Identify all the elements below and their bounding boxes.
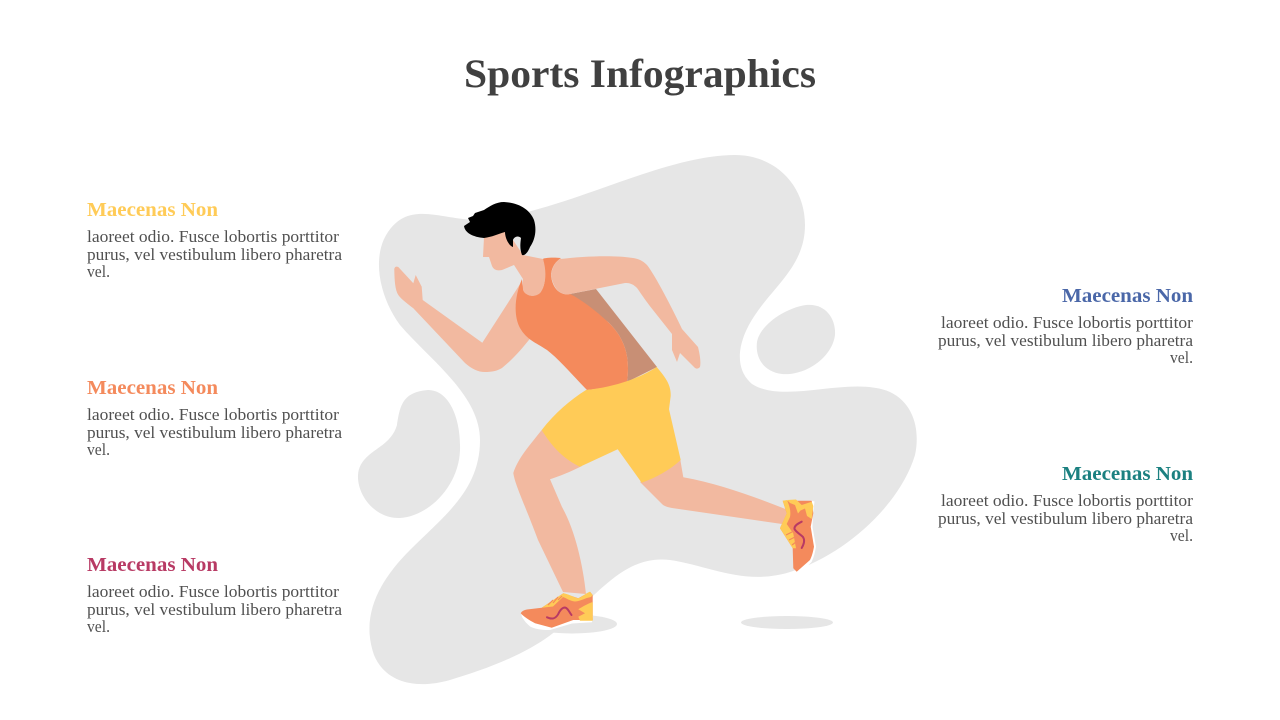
back shade (570, 289, 657, 382)
left block 3: vel. (87, 617, 110, 636)
left block 2: Maecenas Non (87, 377, 218, 399)
hair (464, 202, 535, 255)
right block 1: purus, vel vestibulum libero pharetra (938, 331, 1193, 350)
right block 2: purus, vel vestibulum libero pharetra (938, 509, 1193, 528)
left block 3: purus, vel vestibulum libero pharetra (87, 600, 342, 619)
left block 1 (87, 199, 342, 281)
back shoe (780, 500, 816, 573)
tank top (516, 258, 628, 390)
title: Sports Infographics (464, 51, 816, 96)
left block 1: vel. (87, 262, 110, 281)
right block 1 (938, 285, 1193, 367)
right block 2: Maecenas Non (1062, 463, 1193, 485)
head and neck (483, 231, 545, 296)
front shoe (521, 592, 593, 630)
right block 1: laoreet odio. Fusce lobortis porttitor (941, 313, 1193, 332)
right block 2: vel. (1170, 526, 1193, 545)
near arm and hand (551, 256, 700, 369)
front leg (513, 430, 586, 594)
shadow under front foot (527, 614, 617, 634)
shorts (542, 367, 681, 483)
left block 2: laoreet odio. Fusce lobortis porttitor (87, 405, 339, 424)
left block 2: purus, vel vestibulum libero pharetra (87, 423, 342, 442)
back leg (640, 458, 788, 524)
runner illustration (394, 202, 816, 630)
left block 2 (87, 377, 342, 459)
right block 1: Maecenas Non (1062, 285, 1193, 307)
left block 3: laoreet odio. Fusce lobortis porttitor (87, 582, 339, 601)
left block 1: laoreet odio. Fusce lobortis porttitor (87, 227, 339, 246)
background blobs (358, 155, 917, 684)
right block 2: laoreet odio. Fusce lobortis porttitor (941, 491, 1193, 510)
left block 2: vel. (87, 440, 110, 459)
left block 3 (87, 554, 342, 636)
right block 1: vel. (1170, 348, 1193, 367)
left block 3: Maecenas Non (87, 554, 218, 576)
far arm and hand (394, 267, 532, 372)
left block 1: purus, vel vestibulum libero pharetra (87, 245, 342, 264)
shadow under back foot (741, 616, 833, 629)
right block 2 (938, 463, 1193, 545)
left block 1: Maecenas Non (87, 199, 218, 221)
